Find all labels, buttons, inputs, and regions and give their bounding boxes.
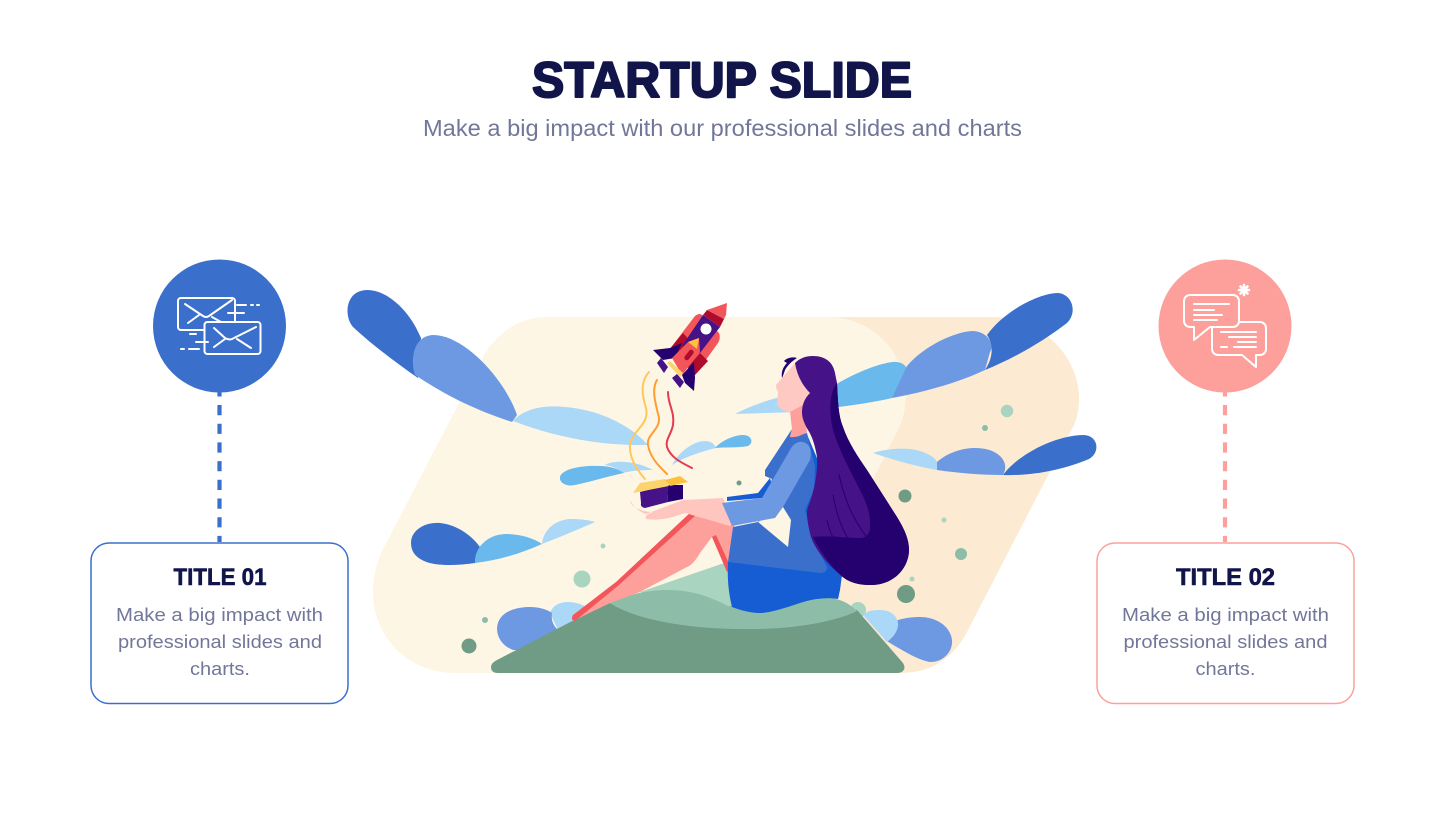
title: STARTUP SLIDE: [532, 52, 912, 108]
card: title 02: [1097, 543, 1354, 704]
connector: dashed line: [1223, 386, 1227, 542]
arm and hand: [630, 442, 811, 526]
icon: sparkle: [1239, 285, 1249, 295]
hill: [491, 562, 904, 673]
card heading: TITLE 02: [1176, 564, 1275, 591]
cloud: small centre right: [672, 435, 751, 465]
cloud: bottom left: [497, 602, 588, 650]
subtitle: Make a big impact with our professional slides and charts: [423, 115, 1022, 141]
cloud: lower left: [411, 519, 595, 565]
cloud: top right: [735, 293, 1073, 414]
background shape: cream: [373, 317, 906, 673]
panel: title 01: [91, 260, 348, 704]
card: title 01: [91, 543, 348, 704]
illustration: woman launching rocket: [348, 290, 1096, 673]
leg: [572, 511, 735, 621]
rocket flames: [630, 372, 692, 479]
background shape: peach: [600, 317, 1079, 673]
dress: [727, 429, 842, 613]
hair: [782, 356, 909, 585]
panel: title 02: [1097, 260, 1354, 704]
card body text: Make a big impact with: [1122, 605, 1329, 625]
cloud: small centre left: [560, 462, 653, 486]
neck and face: [776, 363, 810, 437]
card body text: professional slides and: [118, 632, 322, 652]
card heading: TITLE 01: [174, 564, 266, 591]
card body text: charts.: [190, 659, 250, 679]
connector: dashed line: [217, 386, 222, 542]
card body text: charts.: [1196, 659, 1256, 679]
rocket: [653, 303, 727, 391]
card body text: professional slides and: [1124, 632, 1328, 652]
cloud: top left: [348, 290, 648, 445]
cloud: middle right: [873, 435, 1096, 475]
card body text: Make a big impact with: [116, 605, 323, 625]
cloud: bottom right: [863, 610, 952, 662]
icon: blue circle with envelopes: [153, 260, 286, 392]
woman: [572, 356, 909, 621]
box held in hand: [633, 476, 688, 508]
icon: pink circle with chat bubbles: [1158, 260, 1292, 392]
dots: [462, 405, 1013, 654]
